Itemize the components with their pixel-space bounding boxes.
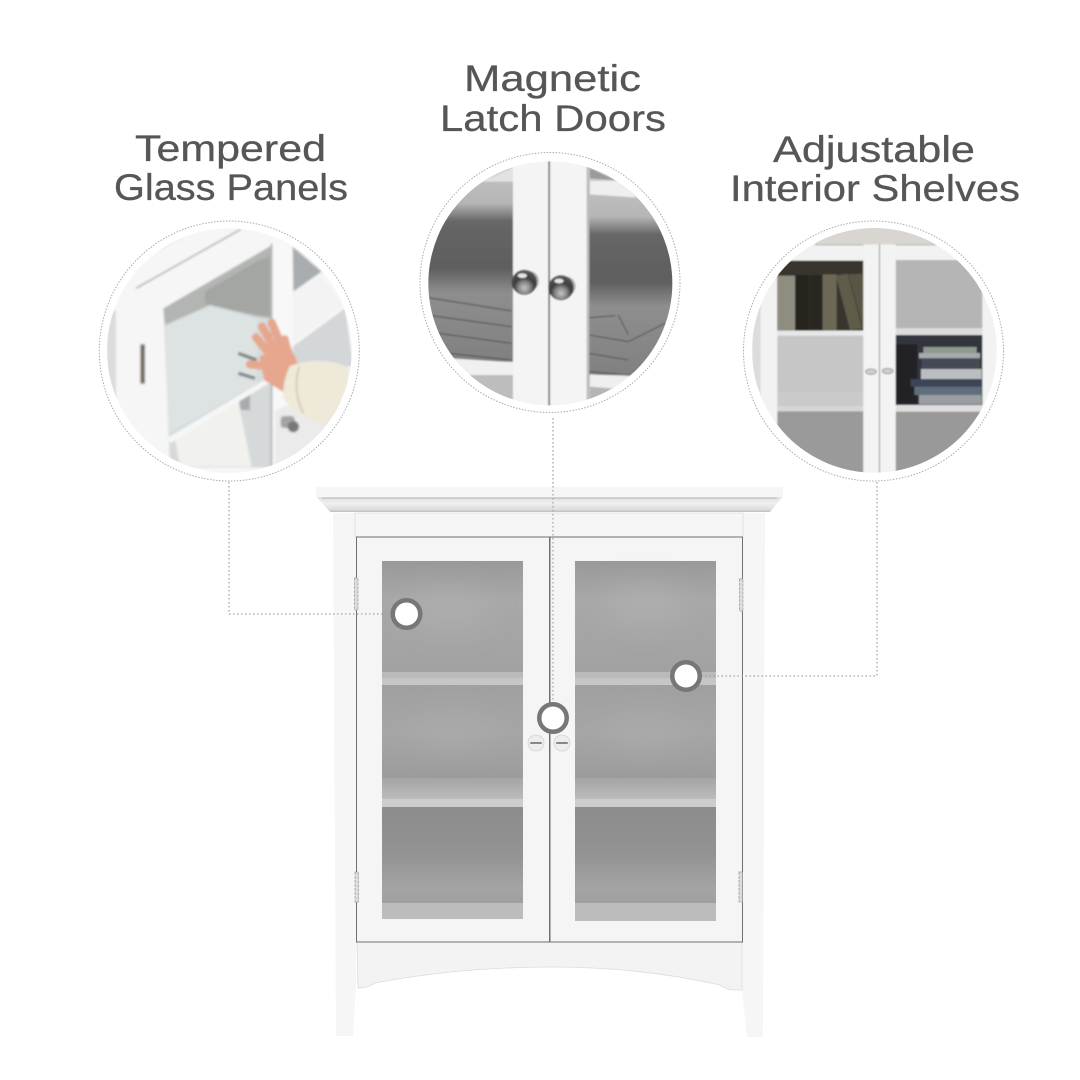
door top seam: [136, 229, 241, 288]
left edge shading: [752, 305, 761, 398]
shelf and lower left compartment: [777, 331, 863, 475]
hotspot: latch: [539, 704, 567, 732]
cabinet top band: [815, 227, 935, 244]
heading: Magnetic Latch Doors: Latch Doors: [440, 98, 666, 139]
right book stack: [896, 344, 982, 404]
photo: interior shelves with books: [748, 225, 1002, 478]
cabinet bottom apron: [357, 942, 742, 990]
hotspot: shelves: [672, 662, 700, 690]
right compartments: [896, 260, 982, 475]
heading: Adjustable Interior Shelves: Adjustable: [773, 129, 975, 170]
connector: magnetic latch: [552, 418, 554, 704]
right side shelf: [293, 277, 343, 343]
right glass with shelves: [575, 561, 716, 921]
right knob: [548, 275, 576, 300]
right side glass box: [293, 247, 322, 292]
cabinet legs and side posts: [333, 513, 765, 1037]
circle outline: glass panels: [99, 221, 359, 481]
heading: Tempered Glass Panels: [114, 128, 348, 208]
upper left compartment: [777, 261, 863, 331]
reflection of box in glass: [163, 246, 271, 325]
towel behind glass: [165, 307, 257, 433]
heading: Tempered Glass Panels: Glass Panels: [114, 167, 348, 208]
door stiles: [862, 244, 897, 404]
left cabinet edge: [107, 310, 116, 397]
small door handles: [866, 368, 893, 374]
shelf front edge: [168, 376, 272, 443]
right folded towels: [588, 168, 675, 402]
heading: Tempered Glass Panels: Tempered: [135, 128, 326, 169]
left glass with shelves: [382, 561, 523, 919]
cornice top: [316, 487, 783, 512]
left door frame: [356, 537, 550, 942]
hotspot: glass panel: [393, 600, 420, 628]
left folded towels: [425, 168, 513, 405]
heading: Magnetic Latch Doors: Magnetic: [464, 58, 641, 99]
heading: Magnetic Latch Doors: [440, 58, 666, 139]
circle outline: magnetic latch: [420, 152, 680, 412]
sleeve cuff shade: [296, 367, 303, 413]
door gap: [548, 158, 550, 408]
sleeve: [283, 361, 349, 427]
photo: magnetic latch doors with towels: [425, 158, 675, 412]
lower cloth: [170, 380, 272, 467]
connector: adjustable shelves: [702, 482, 877, 676]
heading: Adjustable Interior Shelves: [730, 129, 1020, 209]
right door frame: [550, 537, 742, 942]
door knobs: [528, 735, 570, 751]
door hinges: [354, 578, 743, 902]
connector: glass panels: [229, 482, 392, 614]
left books: [777, 274, 863, 331]
door knob: [281, 416, 299, 432]
top door shadow: [155, 234, 190, 252]
photo: hand on tempered glass door: [103, 223, 357, 480]
hand: [250, 323, 297, 392]
door glass: [164, 304, 271, 450]
cabinet header rail: [355, 513, 743, 537]
cabinet illustration: [316, 487, 783, 1037]
door stiles: [513, 158, 588, 408]
heading: Adjustable Interior Shelves: Interior Shelves: [730, 168, 1020, 209]
hinge: [140, 344, 145, 384]
towel wrinkles: [238, 353, 257, 378]
door stile: [272, 242, 293, 472]
left knob: [512, 270, 539, 295]
circle outline: shelves: [744, 221, 1004, 481]
